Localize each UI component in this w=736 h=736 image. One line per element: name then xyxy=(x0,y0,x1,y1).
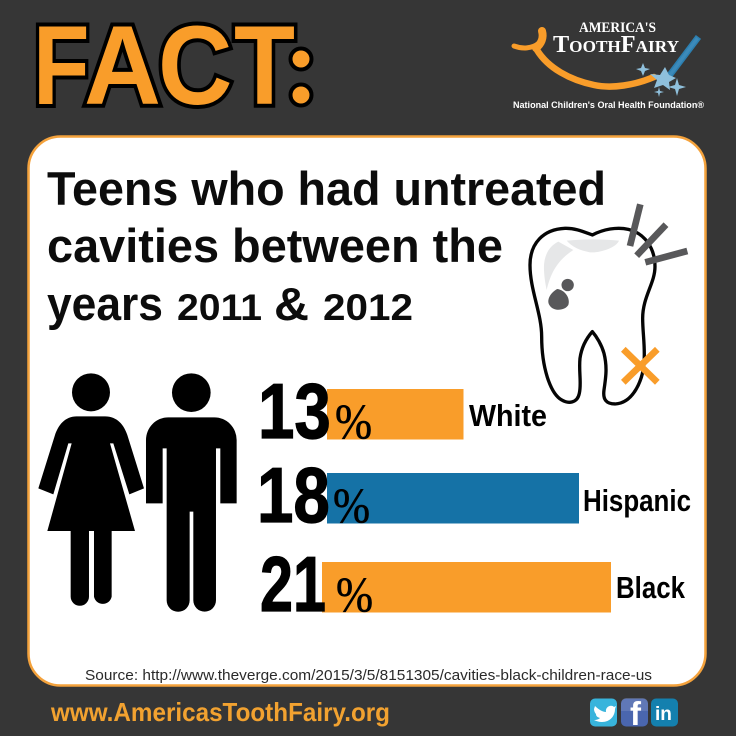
icon: linkedin: in xyxy=(655,704,672,725)
icon: twitter xyxy=(590,698,617,726)
logo: America's ToothFairy xyxy=(513,20,704,110)
orange X mark xyxy=(623,349,657,382)
logo: blue wand xyxy=(666,36,700,79)
title: & xyxy=(274,278,309,330)
bar chart: cavities by group xyxy=(257,369,691,628)
bar: White 13%: % xyxy=(335,395,372,450)
bar: Black 21%: Black xyxy=(616,570,686,605)
bar: Hispanic 18% xyxy=(257,453,691,539)
title: Teens who had untreated xyxy=(47,162,606,215)
logo wordmark: TOOTHFAIRY xyxy=(553,32,679,58)
woman xyxy=(38,373,144,606)
bar: Hispanic 18%: 18 xyxy=(257,453,330,539)
pain lines xyxy=(630,204,687,262)
title: 2012 xyxy=(323,287,413,328)
title: cavities between the xyxy=(47,219,503,272)
panel: main white card xyxy=(28,136,706,686)
logo: orange brush stroke xyxy=(514,31,654,87)
logo: blue stars xyxy=(636,63,686,97)
bar: White 13%: White xyxy=(469,398,547,433)
tooth outline xyxy=(530,228,655,404)
logo wordmark xyxy=(553,20,679,58)
icon: facebook: f xyxy=(630,695,642,732)
bar: Hispanic 18%: Hispanic xyxy=(583,483,691,518)
bar: Hispanic 18%: % xyxy=(333,479,370,534)
icon: tooth with cavity xyxy=(530,204,687,404)
heading: FACT: : xyxy=(285,20,316,122)
heading: FACT: T xyxy=(234,3,295,128)
icon: woman and man figures xyxy=(38,373,237,612)
cavity spots xyxy=(548,278,574,310)
bar: White 13%: 13 xyxy=(258,369,331,455)
social icons xyxy=(590,695,678,732)
bar: White 13% xyxy=(258,369,547,455)
heading: FACT: C xyxy=(158,3,232,128)
logo tagline: National Children's Oral Health Foundation® xyxy=(513,99,704,110)
website url: www.AmericasToothFairy.org xyxy=(50,697,390,727)
man xyxy=(146,373,237,612)
heading: FACT: A xyxy=(84,3,161,128)
heading: FACT xyxy=(33,3,316,128)
bar: Black 21%: % xyxy=(336,568,373,623)
bar: Black 21% xyxy=(260,540,686,628)
title: 2011 xyxy=(177,287,262,328)
title xyxy=(47,162,606,330)
tooth highlight top xyxy=(567,239,619,252)
tooth highlight xyxy=(544,242,573,290)
logo wordmark: AMERICA'S xyxy=(579,20,656,36)
heading: FACT: F xyxy=(33,3,90,128)
bar: Black 21%: 21 xyxy=(260,540,326,628)
source citation: Source: http://www.theverge.com/2015/3/5/8151305/cavities-black-children-race-us xyxy=(85,667,652,684)
title: years xyxy=(47,277,163,330)
